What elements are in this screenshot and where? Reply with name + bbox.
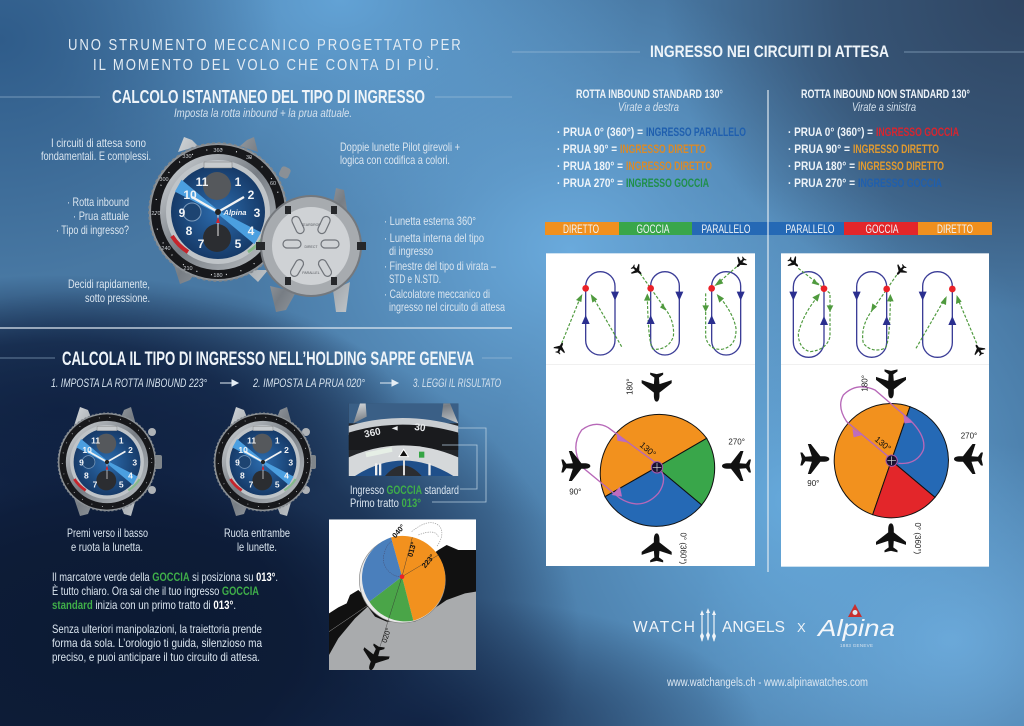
watch: step 2: 1 [275,436,280,446]
watch: front, large: 180 [213,273,223,279]
watch: step 2: 5 [275,480,280,490]
logo separator: x: X [797,620,806,635]
list: standard: · PRUA 90° = [557,144,617,156]
list: standard: INGRESSO DIRETTO [620,144,706,156]
caption: step 2 [224,526,290,554]
colour bar: DIRETTO [937,222,973,236]
watch: front, large: 8 [186,224,193,238]
heading: calcolo istantaneo: CALCOLO ISTANTANEO DEL TIPO DI INGRESSO [112,87,425,107]
caption: ingresso goccia [350,483,459,510]
watch: front, large: 9 [179,206,186,220]
watch: step 2: 10 [238,445,248,455]
watch: step 2: 3 [288,458,293,468]
watch: step 1: 9 [79,458,84,468]
colour bar: GOCCIA [866,222,898,236]
watch: step 1 [58,407,162,516]
watch: step 1: 8 [84,470,89,480]
watch detail crop [349,403,458,476]
list: non standard: · PRUA 270° = [788,178,855,190]
watch: step 1: 2 [128,445,133,455]
watch: front, large: 300 [159,177,169,183]
panel: standard diagrams [546,253,755,566]
paragraph: senza ulteriori manipolazioni [52,622,262,664]
text block: decidi rapidamente: Decidi rapidamente, [68,277,150,291]
list: non standard: INGRESSO DIRETTO [853,144,939,156]
text block: caratteristiche [384,214,505,314]
text block: circuiti di attesa [41,136,151,163]
list: standard: · PRUA 270° = [557,178,623,190]
watch: front, large: 7 [198,237,205,251]
title: IL MOMENTO DEL VOLO CHE CONTA DI PIÙ. [93,56,439,74]
pie chart: non standard [834,387,948,518]
watch: step 1: 1 [119,436,124,446]
paragraph: marcatore verde: È tutto chiaro. Ora sai che il tuo ingresso GOCCIA [52,583,259,598]
list: standard [557,127,746,190]
connector lines [432,428,486,502]
text block: caratteristiche: ingresso nel circuito di attesa [389,300,505,314]
watch: step 1: 10 [82,445,92,455]
column head: standard [576,87,723,114]
watch: step 2: 8 [240,470,245,480]
map: holding Sapre Geneva [329,519,476,675]
text block: caratteristiche: · Finestre del tipo di virata – [384,259,496,273]
watch: front, large: 4 [248,224,255,238]
step 3 label: 3. LEGGI IL RISULTATO [413,376,501,390]
heading labels: non standard: 270° [961,432,977,441]
logo: watch angels: WATCH [633,619,695,636]
colour bar: PARALLELO [702,222,750,236]
watch: step 1: 5 [119,480,124,490]
step 2 label: 2. IMPOSTA LA PRUA 020° [252,376,365,390]
watch: front, large [149,137,292,284]
watch: step 1: 11 [91,436,100,446]
holding patterns: non standard [785,254,987,358]
watch: step 2: 9 [235,458,240,468]
text block: decidi rapidamente [68,277,150,305]
heading labels: standard: 270° [728,438,745,447]
heading labels: non standard: 90° [807,479,819,488]
watch: front, large: 1 [235,175,242,189]
step 1 label: 1. IMPOSTA LA ROTTA INBOUND 223° [51,376,207,390]
watch: step 2 [214,407,316,516]
text block: domande: · Tipo di ingresso? [56,223,129,237]
watch: front, large: 60 [270,181,276,187]
watch detail crop: 30 [414,422,427,434]
arrow: step 1 to 2 [220,380,238,386]
list: non standard: · PRUA 90° = [788,144,850,156]
text block: domande: · Rotta inbound [67,195,129,209]
list: standard: INGRESSO GOCCIA [626,178,709,190]
paragraph: senza ulteriori manipolazioni: Senza ulteriori manipolazioni, la traiettoria prende [52,622,262,636]
column head: non standard: ROTTA INBOUND NON STANDARD 130° [801,87,970,101]
watch: front, large: 2 [248,188,255,202]
watch: step 2: 7 [249,480,254,490]
colour bar: GOCCIA [636,222,670,236]
paragraph: senza ulteriori manipolazioni: forma da sola. L’orologio ti guida, silenzioso ma [52,636,262,650]
logo: alpina: Alpina [816,615,895,641]
map: holding Sapre Geneva: 013° [406,541,418,558]
pie chart: standard [576,414,715,526]
paragraph: marcatore verde: Il marcatore verde della GOCCIA si posiziona su 013°. [52,570,278,584]
caption: step 1: Premi verso il basso [67,526,148,540]
map: holding Sapre Geneva: 020° [380,627,393,644]
list: non standard: · PRUA 0° (360°) = [788,127,873,139]
caption: step 2: le lunette. [237,540,277,554]
list: standard: INGRESSO DIRETTO [626,161,712,173]
watch: step 2: 2 [284,445,289,455]
holding patterns: standard [552,254,749,356]
colour bar: PARALLELO [786,222,834,236]
column head: non standard [801,87,970,114]
heading labels: standard: 90° [569,487,581,496]
watch: step 2: 11 [247,436,256,446]
logo: alpina [816,604,895,648]
watch: case back: PARALLEL [302,271,320,275]
text block: circuiti di attesa: fondamentali. E complessi. [41,149,151,163]
watch: case back: DIRECT [304,245,318,249]
watch: front, large: 30 [246,155,252,161]
text block: doppie lunette: Doppie lunette Pilot girevoli + [340,140,460,154]
logo: watch angels [633,608,785,642]
list: standard: · PRUA 0° (360°) = [557,127,643,139]
watch: step 1: 4 [128,470,133,480]
list: non standard: · PRUA 180° = [788,161,855,173]
map: holding Sapre Geneva: 223° [420,552,436,570]
website urls: www.watchangels.ch - www.alpinawatches.com [666,677,868,689]
text block: circuiti di attesa: I circuiti di attesa sono [51,136,146,150]
panel: non standard diagrams [781,253,989,567]
watch: front, large: 270 [151,211,161,217]
watch: front, large: Alpina [223,208,246,217]
watch: front, large: 10 [183,188,197,202]
list: non standard [788,127,959,190]
colour bar [545,222,992,236]
caption: step 2: Ruota entrambe [224,526,290,540]
heading labels: non standard [807,375,977,555]
heading labels: standard: 0° (360°) [679,532,688,565]
text block: caratteristiche: · Calcolatore meccanico di [384,287,490,301]
heading labels: standard [569,378,745,565]
map: holding Sapre Geneva: 040° [390,522,407,540]
subheading: imposta la rotta: Imposta la rotta inbound + la prua attuale. [174,108,352,120]
list: non standard: INGRESSO DIRETTO [858,161,944,173]
watch: case back [256,188,366,312]
watch: front, large: 360 [213,148,223,154]
plane icons: non standard [800,369,983,552]
text block: doppie lunette: logica con codifica a colori. [340,153,450,167]
watch: front, large: 11 [196,175,209,189]
watch: front, large: 210 [183,266,193,272]
column head: non standard: Virate a sinistra [852,102,916,114]
heading labels: standard: 180° [625,378,634,395]
watch: front, large: 5 [235,237,242,251]
pie chart: non standard: 130° [873,434,893,453]
caption: ingresso goccia: Ingresso GOCCIA standard [350,483,459,497]
text block: domande [56,195,129,237]
logo: watch angels: ANGELS [722,619,785,636]
title [68,37,461,74]
paragraph: marcatore verde [52,570,278,612]
paragraph: marcatore verde: standard inizia con un primo tratto di 013°. [52,598,236,612]
column head: standard: Virate a destra [618,102,679,114]
paragraph: senza ulteriori manipolazioni: preciso, e puoi anticipare il tuo circuito di attesa. [52,650,260,664]
caption: step 1 [67,526,148,554]
text block: caratteristiche: · Lunetta esterna 360° [384,214,476,228]
text block: domande: · Prua attuale [73,209,129,223]
heading: ingresso nei circuiti: INGRESSO NEI CIRCUITI DI ATTESA [650,42,889,61]
list: standard: · PRUA 180° = [557,161,623,173]
heading: calcola il tipo di ingresso: CALCOLA IL TIPO DI INGRESSO NELL’HOLDING SAPRE GENEVA [62,349,474,370]
watch: front, large: 330 [182,154,192,160]
watch: front, large: 3 [254,206,261,220]
watch: front, large: 240 [161,246,171,252]
text block: caratteristiche: STD e N.STD. [389,272,441,286]
heading labels: non standard: 180° [860,375,869,392]
caption: step 1: e ruota la lunetta. [71,540,143,554]
text block: caratteristiche: di ingresso [389,244,433,258]
pie chart: standard: 130° [638,440,658,459]
list: standard: INGRESSO PARALLELO [646,127,746,139]
title: UNO STRUMENTO MECCANICO PROGETTATO PER [68,37,461,54]
text block: caratteristiche: · Lunetta interna del tipo [384,231,484,245]
logo: alpina: 1883 GENEVE [840,643,873,648]
heading labels: non standard: 0° (360°) [913,522,922,555]
text block: doppie lunette [340,140,460,167]
watch: step 1: 7 [93,480,98,490]
text block: decidi rapidamente: sotto pressione. [85,291,150,305]
watch detail crop: 360 [363,426,382,441]
list: non standard: INGRESSO GOCCIA [858,178,942,190]
colour bar: DIRETTO [563,222,599,236]
list: non standard: INGRESSO GOCCIA [876,127,959,139]
column head: standard: ROTTA INBOUND STANDARD 130° [576,87,723,101]
arrow: step 2 to 3 [380,380,398,386]
watch: step 2: 4 [284,470,289,480]
caption: ingresso goccia: Primo tratto 013° [350,496,421,510]
watch: case back: TEARDROP [301,223,321,227]
watch: step 1: 3 [132,458,137,468]
plane icons: standard [561,373,751,562]
